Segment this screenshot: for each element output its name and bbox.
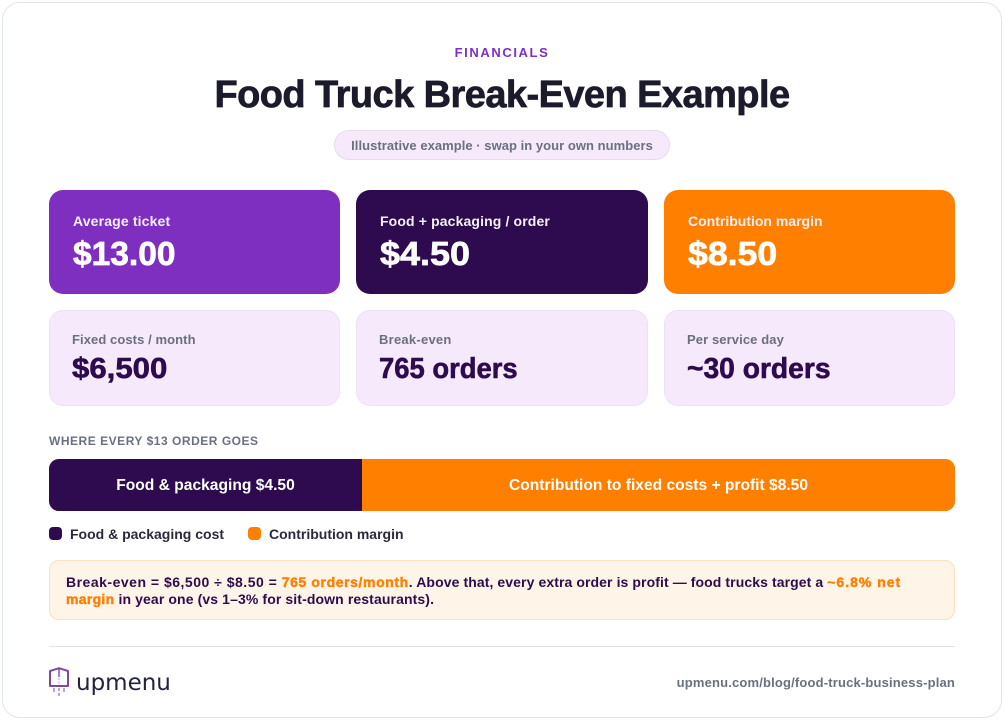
stacked bar: [49, 459, 955, 511]
legend: [49, 526, 404, 542]
segment: contribution: [362, 459, 955, 511]
wordmark: upmenu: [76, 670, 171, 696]
panel: contribution margin: [664, 190, 955, 294]
value: per service day: ~30 orders: [687, 353, 831, 385]
subtitle pill: Illustrative example · swap in your own numbers: [351, 138, 653, 153]
legend swatch: margin: [248, 527, 261, 540]
title: Food Truck Break-Even Example: [214, 74, 790, 116]
label: average ticket: Average ticket: [73, 213, 170, 229]
panel: average ticket: [49, 190, 340, 294]
legend label: food: Food & packaging cost: [70, 526, 224, 542]
source url: upmenu.com/blog/food-truck-business-plan: [677, 675, 955, 690]
panel: per service day: [664, 310, 955, 406]
eyebrow: financials: FINANCIALS: [455, 45, 549, 60]
callout text line 2: margin in year one (vs 1–3% for sit-down restaurants).: [66, 591, 434, 607]
value: break-even: 765 orders: [379, 353, 518, 385]
label: fixed costs: Fixed costs / month: [72, 332, 196, 347]
label: break-even: Break-even: [379, 332, 452, 347]
label: food and packaging: Food + packaging / order: [380, 213, 550, 229]
label: contribution margin: Contribution margin: [688, 213, 823, 229]
footer divider: [49, 646, 955, 647]
callout text line 1: Break-even = $6,500 ÷ $8.50 = 765 orders/month. Above that, every extra order is profit — food trucks target a ~6.8% net: [66, 574, 901, 590]
legend swatch: food: [49, 527, 62, 540]
segment: food and packaging: [49, 459, 362, 511]
value: fixed costs: $6,500: [72, 353, 167, 385]
label: per service day: Per service day: [687, 332, 784, 347]
panel: food and packaging per order: [356, 190, 648, 294]
panel: fixed costs: [49, 310, 340, 406]
segment: food and packaging: Food & packaging $4.50: [116, 477, 295, 494]
icon: book menu: [49, 667, 69, 696]
logo: upmenu: [49, 667, 171, 696]
panel: break-even: [356, 310, 648, 406]
value: contribution margin: $8.50: [688, 235, 777, 272]
callout: [49, 560, 955, 620]
value: average ticket: $13.00: [73, 235, 175, 272]
segment: contribution: Contribution to fixed costs + profit $8.50: [509, 477, 808, 494]
section heading: WHERE EVERY $13 ORDER GOES: [49, 434, 259, 448]
legend label: margin: Contribution margin: [269, 526, 404, 542]
value: food and packaging: $4.50: [380, 235, 470, 272]
subtitle pill: [334, 130, 670, 160]
